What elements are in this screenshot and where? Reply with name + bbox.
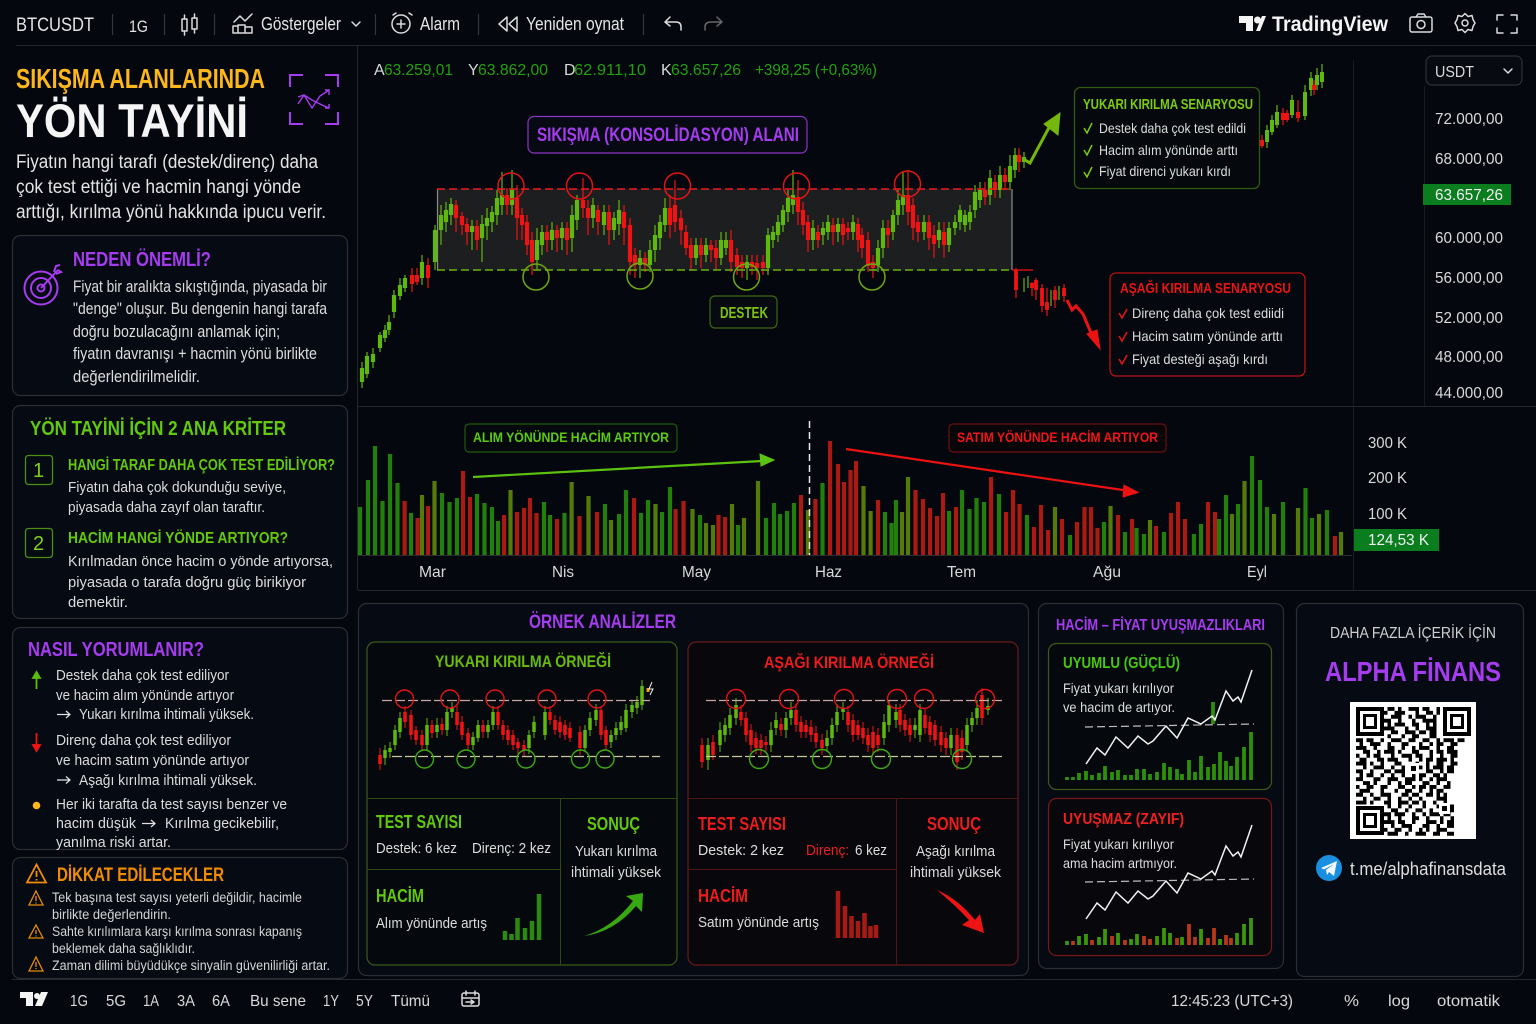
intro text: Fiyatın hangi tarafı (destek/direnç) daha [16,152,318,173]
OHLC readout: 62.911,10 [574,62,646,79]
arrow: result up [584,893,643,936]
channel name: ALPHA FİNANS [1325,656,1501,687]
title line 2: YÖN TAYİNİ [16,94,248,147]
body text: değerlendirilmelidir. [73,368,200,386]
label: sell volume: SATIM YÖNÜNDE HACİM ARTIYOR [957,429,1158,445]
mini candle chart [380,680,653,770]
test circles [726,690,994,768]
test count: TEST SAYISI [698,814,786,834]
card heading: YUKARI KIRILMA ÖRNEĞİ [435,652,611,671]
panel: two criteria [12,406,348,618]
card: aligned: UYUMLU (GÜÇLÜ) [1063,653,1180,672]
body text: doğru bozulacağını anlamak için; [73,323,280,341]
icon: warning small 1 [29,891,43,905]
card: downward example [688,642,1018,965]
icon: target [24,265,61,304]
callout: downward scenario: Hacim satım yönünde arttı [1132,328,1283,344]
OHLC readout: 63.862,00 [478,62,548,79]
arrow: sell volume [846,449,1138,497]
interval: 1G [129,17,148,36]
axis labels: 60.000,00 [1435,230,1503,247]
icon: candles [182,14,197,35]
volume note: Alım yönünde artış [376,915,487,932]
card heading: AŞAĞI KIRILMA ÖRNEĞİ [764,653,934,672]
icon: date range [462,991,479,1006]
volume note [698,886,819,931]
panel: why important [12,236,348,396]
volume note [376,886,487,932]
QR finder marks [1356,707,1471,835]
month axis: Tem [947,564,976,581]
axis labels: 44.000,00 [1435,385,1503,402]
callout: upward scenario: YUKARI KIRILMA SENARYOSU [1083,96,1253,113]
axis labels [1435,111,1503,402]
criterion 2 [68,528,333,611]
test circles [396,690,614,768]
mini volume bars [838,891,876,938]
body text: Fiyat bir aralıkta sıkıştığında, piyasada bir [73,278,327,296]
bullet 3: hacim düşük [56,815,136,832]
currency dropdown [1426,56,1522,85]
criterion 2: piyasada o tarafa doğru güç birikiyor [68,574,306,591]
card: upward example [367,642,677,965]
month axis: Ağu [1093,564,1121,581]
bullet 2 [56,732,257,789]
criterion 1 [68,456,335,516]
heading: ÖRNEK ANALİZLER [529,610,676,633]
volume bars [1067,702,1251,780]
volume note: HACİM [698,886,748,906]
bullet 3: Kırılma gecikebilir, [165,815,279,832]
test count: TEST SAYISI [376,812,462,832]
support and resistance lines [706,700,1002,702]
price line [1086,670,1252,764]
callout: upward scenario: Hacim alım yönünde arttı [1099,142,1238,158]
current price tag [1423,184,1511,205]
panel: volume price divergence [1038,604,1284,968]
test count: 6 kez [855,842,887,859]
price axis [1423,56,1522,402]
test count [376,812,551,857]
green volume bars [360,446,1327,555]
card: divergent [1048,798,1272,956]
support touch circles [523,263,885,290]
icon: tradingview logo [1239,16,1266,31]
olive volume bars [422,477,1341,555]
label: sell volume [949,424,1166,452]
heading: HACİM – FİYAT UYUŞMAZLIKLARI [1056,616,1265,634]
indicators menu: Göstergeler [261,14,341,34]
test count: Destek: 6 kez [376,840,457,857]
price line [1086,825,1252,919]
OHLC readout: A [374,62,385,79]
axis labels: 52.000,00 [1435,310,1503,327]
bullet 3: Her iki tarafta da test sayısı benzer ve [56,796,287,813]
bottom toolbar [20,991,1501,1010]
bullet 1: ve hacim alım yönünde artıyor [56,687,234,704]
bullet 2: Direnç daha çok test ediliyor [56,732,231,749]
icon: indicators [233,14,252,33]
icon: red down arrow [33,733,40,751]
callout: downward scenario: AŞAĞI KIRILMA SENARYOSU [1120,279,1291,297]
volume note: HACİM [376,886,424,906]
breakout level [1085,879,1254,882]
caution 3: Zaman dilimi büyüdükçe sinyalin güvenilirliği artar. [52,958,330,973]
month axis: Mar [419,564,447,581]
consolidation range box [437,189,1012,270]
icon: green up arrow [33,672,40,689]
label: consolidation area [528,116,807,153]
month axis: Eyl [1247,564,1267,581]
callout: downward scenario [1110,273,1305,376]
axis labels: 72.000,00 [1435,111,1503,128]
panel: cautions [12,858,348,978]
result: SONUÇ [927,814,981,834]
red volume bars [405,441,1335,555]
body text: fiyatın davranışı + hacmin yönü birlikte [73,345,317,363]
icon: camera [1410,14,1432,32]
volume axis: 300 K [1368,435,1407,452]
bullet 3: yanılma riski artar. [56,834,171,851]
month axis: Nis [552,564,574,581]
volume axis: 100 K [1368,506,1407,523]
axis labels: 48.000,00 [1435,349,1503,366]
resistance touch circles [498,171,920,199]
range buttons: 6A [212,993,230,1010]
support and resistance dashed lines [437,188,1012,190]
callout: upward scenario: Fiyat direnci yukarı kırdı [1099,163,1231,179]
bullet 3 [56,796,287,851]
panel: channel promo [1296,604,1524,976]
number 1 [26,456,52,484]
label: support: DESTEK [720,305,768,322]
symbol: BTCUSDT [16,14,94,36]
icon: yellow dot [33,802,40,809]
green candles [362,148,1024,388]
icon: undo [665,17,681,30]
label: buy volume: ALIM YÖNÜNDE HACİM ARTIYOR [473,429,669,445]
icon: warning small 3 [29,957,43,971]
range buttons: 5Y [356,993,373,1010]
heading: NEDEN ÖNEMLİ? [73,248,211,271]
volume bars [1067,918,1251,945]
range buttons: 1Y [323,993,339,1010]
icon: redo [705,17,722,30]
OHLC readout: K [661,62,672,79]
result [910,814,1001,881]
support and resistance lines [382,700,650,702]
body text: "denge" oluşur. Bu dengenin hangi tarafa [73,300,328,318]
bullet 2: Aşağı kırılma ihtimali yüksek. [79,772,257,789]
icon: breakout frame [290,75,338,124]
callout: upward scenario: Destek daha çok test edildi [1099,120,1246,136]
title block [16,63,338,223]
QR code [1350,702,1476,839]
caution 1: birlikte değerlendirin. [52,907,171,922]
heading: DİKKAT EDİLECEKLER [57,865,224,886]
card: divergent: ama hacim artmıyor. [1063,855,1177,871]
card: aligned: ve hacim de artıyor. [1063,699,1175,715]
label: support [710,296,777,328]
arrow: buy volume [473,454,774,477]
range buttons: Bu sene [250,993,306,1010]
icon: settings [1455,14,1475,32]
month axis: Haz [815,564,842,581]
range buttons: 1G [70,993,88,1010]
scale options: % [1344,993,1359,1010]
top toolbar [16,13,1517,36]
month axis: May [682,564,711,581]
OHLC readout [374,62,877,79]
volume axis: 200 K [1368,470,1407,487]
OHLC readout: 63.259,01 [384,62,453,79]
brand: TradingView [1272,13,1389,36]
red candles [412,148,1019,292]
icon: chevron [352,22,360,26]
icon: alarm [392,13,412,33]
divider: trend change [808,421,810,555]
price chart [362,64,1322,388]
icon: replay [499,17,517,31]
intro text [16,152,326,223]
panel: how to interpret [12,628,348,851]
axis labels: 56.000,00 [1435,270,1503,287]
number 1: 1 [33,460,44,482]
callout: upward scenario [1074,88,1260,188]
result [571,814,661,881]
icon: warning small 2 [29,925,43,938]
intro text: arttığı, kırılma yönü hakkında ipucu verir. [16,202,326,223]
criterion 2: demektir. [68,594,128,611]
criterion 1: piyasada daha zayıf olan taraftır. [68,499,265,516]
scale options: log [1388,993,1410,1010]
caution 2: beklemek daha sağlıklıdır. [52,941,195,956]
scale options [1344,993,1501,1010]
volume note: Satım yönünde artış [698,914,819,931]
icon: telegram [1316,855,1342,881]
current volume tag: 124,53 K [1368,532,1429,549]
clock: 12:45:23 (UTC+3) [1171,993,1293,1010]
channel link: t.me/alphafinansdata [1350,859,1507,879]
criterion 2: HACİM HANGİ YÖNDE ARTIYOR? [68,528,288,547]
heading: YÖN TAYİNİ İÇİN 2 ANA KRİTER [30,417,286,440]
breakout level [1085,724,1254,727]
body text [73,278,328,386]
arrow: upward breakout [1025,113,1060,163]
mini volume bars [505,894,539,940]
scale options: otomatik [1437,993,1501,1010]
icon: tradingview logo [20,992,48,1006]
month axis [419,564,1267,581]
result: Aşağı kırılma [916,843,996,860]
range buttons: 5G [106,993,126,1010]
criterion 2: Kırılmadan önce hacim o yönde artıyorsa, [68,553,333,570]
OHLC readout: D [564,62,576,79]
card: divergent: UYUŞMAZ (ZAYIF) [1063,811,1184,828]
alarm label: Alarm [420,14,460,34]
card: aligned: Fiyat yukarı kırılıyor [1063,680,1174,696]
caution 1: Tek başına test sayısı yeterli değildir, hacimle [52,890,302,905]
result: Yukarı kırılma [575,843,658,860]
number 2: 2 [33,533,44,555]
range buttons: Tümü [391,993,430,1010]
OHLC readout: +398,25 (+0,63%) [755,62,877,79]
heading: NASIL YORUMLANIR? [28,638,204,661]
result: ihtimali yüksek [571,864,661,881]
bullet 1 [56,667,254,723]
callout: downward scenario: Direnç daha çok test ediidi [1132,305,1284,321]
caution 2 [52,924,302,956]
test count: Destek: 2 kez [698,842,784,859]
criterion 1: HANGİ TARAF DAHA ÇOK TEST EDİLİYOR? [68,456,335,474]
intro text: çok test ettiği ve hacmin hangi yönde [16,177,301,198]
panel: example analyses [358,604,1028,976]
test count: Direnç: 2 kez [472,840,551,857]
label: buy volume [465,424,677,452]
range buttons [70,993,430,1010]
range buttons: 1A [143,993,159,1010]
downside candles [1012,268,1064,316]
axis labels: 68.000,00 [1435,151,1503,168]
promo line: DAHA FAZLA İÇERİK İÇİN [1330,623,1496,642]
card: aligned [1048,644,1272,790]
icon: warning [27,864,46,882]
callout: downward scenario: Fiyat desteği aşağı kırdı [1132,351,1268,367]
OHLC readout: Y [468,62,479,79]
test count [698,814,887,859]
bullet 2: ve hacim satım yönünde artıyor [56,752,249,769]
range buttons: 3A [177,993,195,1010]
icon: fullscreen [1497,15,1517,33]
arrow: downward breakout [1067,300,1100,349]
current volume tag [1354,529,1439,551]
criterion 1: Fiyatın daha çok dokunduğu seviye, [68,479,286,496]
card: divergent: Fiyat yukarı kırılıyor [1063,836,1174,852]
upper breakout candles [1262,64,1322,148]
volume axis [1368,435,1407,523]
mini candle chart [702,688,988,770]
current price tag: 63.657,26 [1435,187,1503,204]
OHLC readout: 63.657,26 [671,62,741,79]
volume chart [358,421,1439,581]
replay label: Yeniden oynat [526,14,624,34]
bullet 1: Destek daha çok test ediliyor [56,667,229,684]
caution 1 [52,890,302,922]
caution 2: Sahte kırılımlara karşı kırılma sonrası kapanış [52,924,302,939]
test count: Direnç: [806,842,849,859]
currency dropdown: USDT [1435,64,1474,81]
arrow: result down [937,890,984,933]
number 2 [26,528,52,558]
bullet 1: Yukarı kırılma ihtimali yüksek. [79,706,254,723]
label: consolidation area: SIKIŞMA (KONSOLİDASYON) ALANI [537,125,799,146]
title line 1: SIKIŞMA ALANLARINDA [16,63,265,94]
result: ihtimali yüksek [910,864,1001,881]
result: SONUÇ [587,814,640,834]
